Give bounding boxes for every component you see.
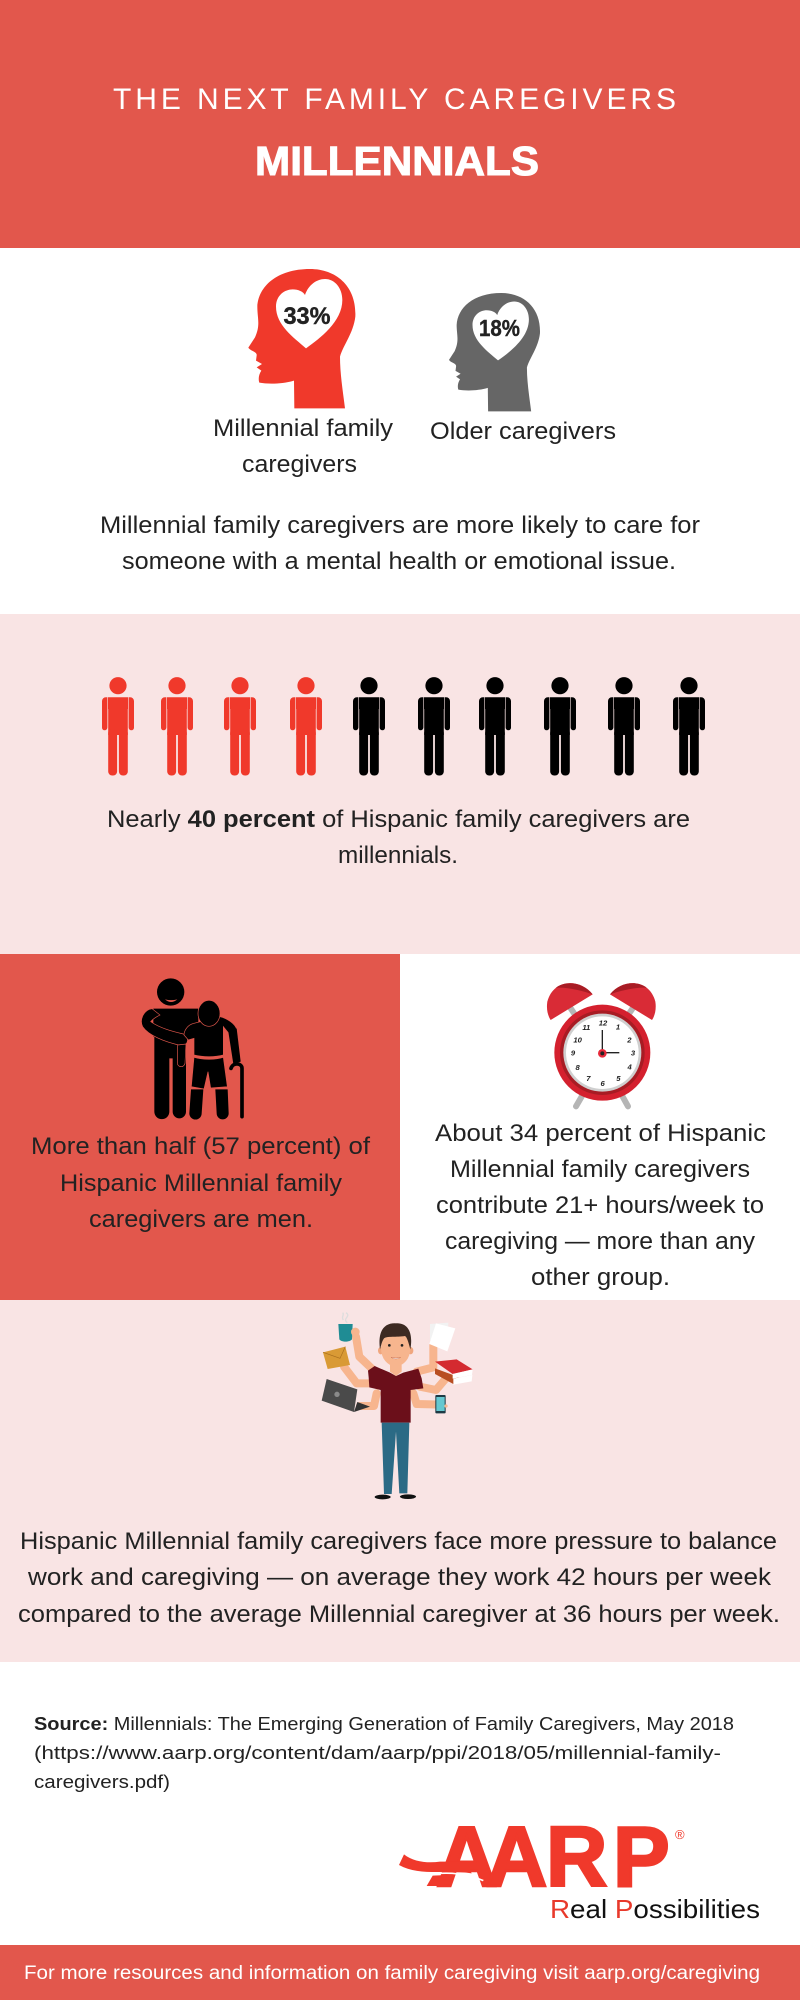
text: source citation: (https://www.aarp.org/content/dam/aarp/ppi/2018/05/millennial-family- (34, 1742, 721, 1763)
icon: alarm clock: 11 (582, 1023, 590, 1032)
text: work hours comparison: Hispanic Millennial family caregivers face more pressure to balance (20, 1528, 777, 1555)
icon: alarm clock: 5 (616, 1074, 621, 1083)
logo: AARP Real Possibilities: ® (675, 1827, 685, 1842)
panel: men caregivers (0, 954, 400, 1300)
text: 57 percent men: caregivers are men. (89, 1206, 313, 1233)
icon: alarm clock: 9 (571, 1049, 576, 1058)
text: 34 percent hours: other group. (531, 1264, 670, 1291)
icon: alarm clock: 3 (631, 1049, 636, 1058)
panel: footer (0, 1945, 800, 2000)
icon: alarm clock: 7 (586, 1074, 591, 1083)
text: 34 percent hours: Millennial family caregivers (450, 1156, 750, 1183)
text: work hours comparison: work and caregiving — on average they work 42 hours per week (27, 1564, 772, 1591)
logo: AARP Real Possibilities: Real Possibilities (550, 1894, 760, 1924)
text: work hours comparison: compared to the average Millennial caregiver at 36 hours per week. (18, 1601, 780, 1628)
text: mental health statement: Millennial family caregivers are more likely to care for (100, 512, 700, 539)
logo: AARP Real Possibilities: AARP (436, 1810, 670, 1905)
icon: alarm clock: 1 (616, 1022, 620, 1031)
text: 40 percent statement: Nearly 40 percent of Hispanic family caregivers are (107, 806, 690, 833)
icon: red head 33 percent (248, 269, 355, 408)
icon: alarm clock: 10 (573, 1035, 583, 1044)
icon: alarm clock: 6 (601, 1079, 606, 1088)
label: older caregivers: Older caregivers (430, 418, 616, 445)
text: source citation: Source: Millennials: The Emerging Generation of Family Caregivers, May 2018 (34, 1713, 734, 1734)
icon: red head 33 percent: 33% (284, 303, 330, 330)
panel: work and caregiving balance (0, 1300, 800, 1662)
panel: header (0, 0, 800, 248)
text: 34 percent hours: contribute 21+ hours/week to (436, 1192, 764, 1219)
text: resources link: For more resources and information on family caregiving visit aarp.org/caregiving (24, 1963, 760, 1984)
icon: multitasking man (322, 1313, 473, 1499)
text: 34 percent hours: caregiving — more than any (445, 1228, 755, 1255)
text: mental health statement (100, 512, 700, 575)
icon: alarm clock: 2 (626, 1035, 632, 1044)
text: work hours comparison (18, 1528, 780, 1628)
panel: mental health comparison (0, 248, 800, 614)
text: 57 percent men: Hispanic Millennial family (60, 1170, 342, 1197)
panel: hispanic caregivers pictogram (0, 614, 800, 954)
chart: ten person pictogram (102, 677, 705, 776)
text: 40 percent statement (107, 806, 690, 869)
icon: alarm clock (547, 983, 656, 1106)
icon: alarm clock: 8 (576, 1063, 581, 1072)
label: millennial family caregivers: caregivers (242, 451, 357, 478)
label: millennial family caregivers: Millennial family (213, 415, 393, 442)
title line: THE NEXT FAMILY CAREGIVERS (113, 83, 676, 116)
text: 40 percent statement: millennials. (338, 842, 458, 869)
panel: hours per week (400, 954, 800, 1300)
text: 57 percent men: More than half (57 percent) of (31, 1133, 370, 1160)
text: mental health statement: someone with a mental health or emotional issue. (122, 548, 676, 575)
text: 34 percent hours (435, 1120, 766, 1291)
title: millennials: MILLENNIALS (255, 138, 539, 184)
icon: alarm clock: 4 (627, 1063, 633, 1072)
logo: AARP Real Possibilities (399, 1810, 760, 1924)
text: 34 percent hours: About 34 percent of Hispanic (435, 1120, 766, 1147)
icon: caregiver helping elder (141, 978, 242, 1119)
label: millennial family caregivers (213, 415, 393, 478)
icon: grey head 18 percent: 18% (479, 315, 520, 341)
text: 57 percent men (31, 1133, 370, 1233)
text: source citation: caregivers.pdf) (34, 1771, 170, 1792)
icon: grey head 18 percent (449, 293, 540, 411)
text: source citation (34, 1713, 734, 1792)
icon: alarm clock: 12 (599, 1018, 608, 1027)
